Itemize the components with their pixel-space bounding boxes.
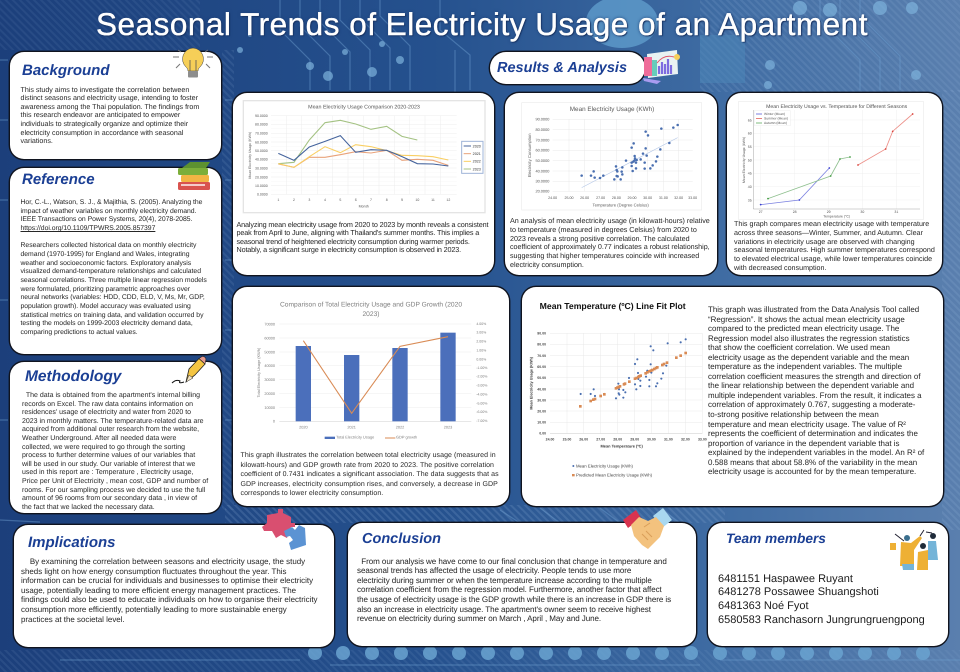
text: regression explanation: the linear relationship between the dependent variable and	[708, 381, 914, 390]
panel: conclusion	[348, 523, 696, 646]
text: methodology body: used in this report are : Temperature , Electricity usage,	[22, 469, 193, 476]
text: regression explanation: that show the coefficient correlation. We used mean	[708, 343, 890, 352]
text: regression explanation: represents the coefficient of determination and indicates the	[708, 429, 918, 438]
chart: mean temperature line fit plot: 27.00	[596, 438, 605, 442]
chart: electricity usage vs temperature by season: Temperature (°C)	[823, 215, 850, 219]
text: implications body: information can be crucial for individuals and businesses to optimise their electricity	[21, 576, 313, 585]
heading: implications: Implications	[28, 534, 116, 551]
text: seasonal caption: across three seasons—Winter, Summer, and Autumn. Clear	[734, 229, 923, 237]
text: GDP caption: GDP increases, electricity consumption rises, and conversely, a decrease in GDP	[240, 480, 498, 488]
chart: mean electricity usage comparison: 40.0000	[255, 158, 268, 162]
chart: mean electricity usage scatter: 60.0000	[535, 149, 549, 153]
chart: total electricity usage and GDP growth: 40000	[264, 364, 275, 368]
text: regression explanation: temperature as the independent variables. The multiple	[708, 362, 902, 371]
chart: mean electricity usage comparison: 2021	[473, 152, 481, 156]
chart: total electricity usage and GDP growth: 0	[273, 420, 275, 424]
text: regression explanation: correlation of approximately 0.767, suggesting a moderate-	[708, 400, 915, 409]
chart: mean electricity usage comparison: 30.0000	[255, 166, 268, 170]
text: implications body: consumption more efficiently, potentially leading to more sustainable energy	[21, 605, 287, 614]
text: background body: electricity consumption in accordance with seasonal	[20, 129, 183, 137]
text: seasonal caption: to elevated electrical usage, while lower temperatures coincide	[734, 255, 932, 263]
chart: electricity usage vs temperature by season: 55	[748, 145, 752, 149]
chart: total electricity usage and GDP growth: 2023	[444, 425, 452, 429]
chart: electricity usage vs temperature by season: 28	[793, 210, 797, 214]
text: regression explanation: correlation coefficient measures the strength and direction of	[708, 372, 921, 381]
text: regression explanation: “Regression”. It shows the actual mean electricity usage	[708, 315, 905, 324]
chart: total electricity usage and GDP growth: -5.00%	[476, 401, 487, 405]
text: team member list: 6481363 Noé Fyot	[718, 600, 809, 612]
text: seasonal caption: variations in electricity usage are observed with changing	[734, 238, 915, 246]
text: scatter caption: coefficient of approximately 0.77 indicates a robust relationship,	[510, 243, 710, 251]
chart: mean temperature line fit plot: 80.00	[537, 343, 546, 347]
chart: mean temperature line fit plot: 25.00	[563, 438, 571, 442]
chart: mean electricity usage scatter: 31.00	[659, 196, 668, 200]
chart: mean electricity usage scatter: 50.0000	[535, 159, 549, 163]
icon: pencil	[172, 356, 206, 384]
chart: mean temperature line fit plot: Mean Electricity Usage (KWh)	[530, 357, 534, 410]
chart: mean temperature line fit plot: 70.00	[537, 354, 546, 358]
text: citation and summary: weather and socioeconomic factors. Exploratory analysis	[20, 260, 191, 267]
chart: total electricity usage and GDP growth: 3.00%	[476, 331, 486, 335]
heading: team members: Team members	[726, 531, 826, 546]
text: scatter caption: An analysis of mean electricity usage (in kilowatt-hours) relative	[510, 217, 710, 225]
chart: total electricity usage and GDP growth: GDP growth	[396, 435, 417, 440]
chart: electricity usage vs temperature by season: Summer (Mean)	[764, 117, 788, 121]
chart: total electricity usage and GDP growth: 4.00%	[476, 322, 486, 326]
text: conclusion body: revenue on electricity during summer on March , April , May and June.	[357, 614, 601, 623]
icon: team celebrating	[890, 530, 938, 570]
chart: total electricity usage and GDP growth: 70000	[264, 322, 275, 326]
chart: mean electricity usage scatter: 28.00	[612, 196, 621, 200]
chart: mean electricity usage comparison: Month	[359, 205, 369, 209]
chart: total electricity usage and GDP growth: 20000	[264, 392, 275, 396]
chart: mean electricity usage scatter: 90.0000	[535, 118, 549, 122]
text: seasonal caption: This graph compares mean electricity usage with temperature	[734, 220, 929, 228]
text: seasonal caption: with decreased consumption.	[734, 264, 826, 272]
text: methodology body: process to further determine values of our variables that	[22, 452, 195, 459]
text: methodology body: 2023 in monthly matters. The temperature-related data are	[22, 418, 204, 425]
chart: mean electricity usage comparison: 20.0000	[255, 175, 268, 179]
chart: mean electricity usage scatter: Mean Electricity Usage (KWh)	[570, 106, 654, 113]
chart: mean electricity usage comparison: 9	[401, 198, 403, 202]
chart: total electricity usage and GDP growth: 0.00%	[476, 357, 486, 361]
chart: mean electricity usage comparison: 60.0000	[255, 140, 268, 144]
heading: background: Background	[22, 62, 110, 79]
chart: mean electricity usage scatter: 30.00	[643, 196, 652, 200]
chart: mean electricity usage scatter: 20.0000	[535, 190, 549, 194]
text: seasonal caption: seasonal temperatures. High summer temperatures correspond	[734, 246, 935, 254]
chart: electricity usage vs temperature by season: 60	[748, 132, 752, 136]
chart: mean temperature line fit plot: 10.00	[537, 421, 546, 425]
text: regression explanation: This graph was illustrated from the Data Analysis Tool called	[708, 305, 919, 314]
chart: mean electricity usage scatter: 33.00	[688, 196, 697, 200]
text: methodology body: residences' usage of electricity and water from 2020 to	[22, 409, 191, 416]
text: GDP caption: corresponds to lower electricity consumption.	[240, 490, 383, 497]
chart: total electricity usage and GDP growth: 2.00%	[476, 340, 486, 344]
chart: total electricity usage and GDP growth: 2023)	[362, 310, 380, 318]
title: Seasonal Trends of Electricity Usage of an Apartment	[96, 6, 868, 42]
heading: reference: Reference	[22, 171, 95, 188]
chart: total electricity usage and GDP growth: -6.00%	[476, 410, 487, 414]
text: methodology body: Price per Unit of Electricity , mean cost, GDP and number of	[22, 478, 208, 485]
chart: total electricity usage and GDP growth: 2021	[347, 425, 356, 429]
chart: mean temperature line fit plot: Mean Electricity Usage (KWh)	[576, 463, 633, 468]
chart: mean electricity usage comparison: 8	[386, 198, 388, 202]
icon: analytics chart	[643, 50, 680, 84]
chart: electricity usage vs temperature by season: 35	[748, 198, 752, 202]
text: citation and summary: Hor, C.-L., Watson, S. J., & Majithia, S. (2005). Analyzing the	[20, 199, 202, 206]
chart: total electricity usage and GDP growth: 2020	[299, 425, 308, 429]
text: background body	[20, 86, 199, 145]
chart: mean temperature line fit plot: 24.00	[546, 438, 554, 442]
heading: results and analysis: Results & Analysis	[497, 60, 627, 76]
text: team member list	[718, 572, 925, 626]
chart: mean electricity usage scatter: 80.0000	[535, 128, 549, 132]
text: line chart caption: seasonal trend of heightened electricity consumption during warmer periods.	[236, 237, 470, 246]
text: citation and summary	[20, 199, 207, 336]
chart: total electricity usage and GDP growth: -4.00%	[476, 393, 487, 397]
text: regression explanation: compared to the predicted mean electricity usage. The	[708, 324, 899, 333]
text: methodology body: amount of 96 rooms from our secondary data , in view of	[22, 495, 197, 502]
text: GDP caption: kilowatt-hours) and GDP growth rate from 2020 to 2023. The positive correlation	[240, 462, 494, 468]
chart: mean electricity usage comparison	[242, 100, 486, 214]
text: background body: distinct seasons and electricity usage, intending to foster	[20, 94, 198, 102]
text: implications body: findings could also be used to educate individuals on how to organise their electricity	[21, 595, 318, 604]
text: citation and summary: seasonal correlations. Three multiple linear regression models	[20, 277, 207, 284]
text: methodology body: records on Excel. The raw data contains information on	[22, 401, 193, 408]
panel: monthly line chart	[233, 93, 494, 275]
text: methodology body: acquired from additional outer research from the website,	[22, 426, 199, 433]
chart: electricity usage vs temperature by season: 50	[748, 158, 752, 162]
chart: mean temperature line fit plot: 30.00	[537, 398, 546, 402]
text: regression explanation: explained by the independent variables in the model. An R² of	[708, 448, 924, 457]
icon: stack of books	[178, 162, 210, 190]
text: citation and summary: population growth). Model accuracy was evaluated using	[20, 303, 191, 310]
text: conclusion body	[357, 556, 671, 623]
text: citation and summary: impact of weather variables on monthly electricity demand.	[20, 208, 196, 215]
chart: mean temperature line fit plot: 31.00	[664, 438, 673, 442]
chart: mean electricity usage comparison: 2023	[473, 167, 481, 171]
panel: team members	[708, 523, 948, 646]
chart: mean electricity usage scatter: 40.0000	[535, 169, 549, 173]
chart: mean temperature line fit plot: Predicted Mean Electricity Usage (KWh)	[576, 473, 652, 478]
text: GDP caption: This graph illustrates the correlation between total electricity usage (measured in	[240, 452, 496, 459]
text: background body: individuals to strategically organize and optimize their	[20, 120, 188, 128]
chart: electricity usage vs temperature by season: Autumn (Mean)	[764, 121, 787, 125]
text: regression explanation: to-strong positive relationship between the mean	[708, 410, 879, 419]
text: scatter caption: to temperature (measured in degrees Celsius) from 2020 to	[510, 226, 697, 234]
icon: puzzle pieces	[262, 509, 306, 550]
chart: mean temperature line fit plot: Mean Temperature (ºC)	[601, 444, 643, 448]
text: seasonal caption	[734, 220, 935, 272]
text: line chart caption: peak from April to June, aligning with Thailand's summer months. This implies a	[236, 228, 479, 237]
chart: mean temperature line fit plot: Mean Temperature (ºC) Line Fit Plot	[540, 301, 686, 311]
text: GDP caption	[240, 452, 499, 497]
chart: mean electricity usage scatter: 30.0000	[535, 180, 549, 184]
chart: electricity usage vs temperature by season: 30	[860, 210, 864, 214]
chart: mean electricity usage comparison: 12	[446, 198, 450, 202]
chart: electricity usage vs temperature by season: 29	[827, 210, 831, 214]
panel: electricity and GDP chart	[233, 287, 509, 506]
chart: electricity usage vs temperature by season: Mean Electricity Usage vs. Temperature for Different Seasons	[766, 104, 907, 109]
text: methodology body	[22, 392, 208, 511]
chart: mean temperature line fit plot: 50.00	[537, 376, 546, 380]
text: citation and summary: Researchers collected historical data on monthly electricity	[20, 242, 196, 249]
icon: light bulb	[173, 48, 213, 78]
text: line chart caption: Analyzing mean electricity usage from 2020 to 2023 by month reveals a consistent	[236, 220, 488, 229]
chart: mean electricity usage comparison: 4	[324, 198, 326, 202]
text: conclusion body: From our analysis we have come to our final conclusion that change in temperature and	[361, 556, 667, 566]
chart: mean electricity usage scatter: 70.0000	[535, 138, 549, 142]
text: implications body: usage, potentially leading to more efficient energy management practices. The	[21, 586, 296, 595]
text: implications body: sheds light on how energy consumption fluctuates throughout the year. This	[21, 567, 286, 576]
text: regression explanation	[708, 305, 924, 476]
panel: implications	[14, 525, 334, 647]
chart: mean electricity usage scatter: 27.00	[596, 196, 605, 200]
chart: total electricity usage and GDP growth: -1.00%	[476, 366, 487, 370]
chart: mean temperature line fit plot: 32.00	[681, 438, 690, 442]
chart: mean electricity usage comparison: 2020	[473, 144, 481, 148]
chart: mean electricity usage scatter: 25.00	[564, 196, 574, 200]
chart: mean temperature line fit plot: 29.00	[630, 438, 639, 442]
chart: mean electricity usage comparison: 90.0000	[255, 114, 268, 118]
text: citation and summary: testing the models on 1999-2003 electricity demand data,	[20, 320, 193, 327]
text: methodology body: will be used in our study. Our variable of interest that we	[22, 461, 195, 468]
text: methodology body: rooms. For our sampling process we decided to use the full	[22, 487, 205, 494]
chart: mean electricity usage scatter: 32.00	[674, 196, 683, 200]
chart: total electricity usage and GDP growth: -3.00%	[476, 384, 487, 388]
text: conclusion body: electricity during summer or when the temperature increase according to the multiple	[357, 576, 652, 585]
text: methodology body: the fact that we lacked the necessary data.	[22, 504, 155, 511]
heading panel: results and analysis	[490, 52, 645, 84]
chart: total electricity usage and GDP growth	[257, 301, 488, 440]
chart: mean electricity usage comparison: 80.0000	[255, 123, 268, 127]
text: conclusion body: correlation coefficient from the regression model. Furthermore, another factor that affect	[357, 585, 662, 594]
text: regression explanation: proportion of variance in the dependent variable that is	[708, 439, 900, 448]
text: team member list: 6481151 Haspawee Ruyant	[718, 572, 853, 584]
text: regression explanation: electricity usage as the dependent variable and the mean	[708, 353, 909, 362]
panel: regression line fit plot	[522, 287, 943, 506]
chart: mean temperature line fit plot: 0.00	[539, 432, 546, 436]
chart: total electricity usage and GDP growth: Total Electricity Usage (KWh)	[257, 348, 261, 397]
chart: total electricity usage and GDP growth: -7.00%	[476, 419, 487, 423]
text: conclusion body: the usage of electricity usage is the GDP growth while there is an increase in GDP there is	[357, 595, 671, 604]
chart: total electricity usage and GDP growth: 50000	[264, 350, 275, 354]
chart: electricity usage vs temperature by season: 65	[748, 118, 752, 122]
chart: electricity usage vs temperature by season: 40	[748, 185, 752, 189]
chart: mean electricity usage comparison: 1	[277, 198, 279, 202]
chart: mean electricity usage scatter: Electricity Consumption	[527, 133, 532, 177]
chart: mean temperature line fit plot: 60.00	[537, 365, 546, 369]
chart: mean temperature line fit plot: 26.00	[579, 438, 588, 442]
text: citation and summary: neural networks (variables: HDD, CDD, ELD, V, Ms, Mr, GDP,	[20, 294, 205, 301]
chart: total electricity usage and GDP growth: 60000	[264, 336, 275, 340]
text: citation and summary: demand (1970-1995) for England and Wales, integrating	[20, 251, 189, 258]
chart: mean temperature line fit plot: 28.00	[613, 438, 622, 442]
chart: mean electricity usage comparison: Mean Electricity Usage (KWh)	[248, 132, 252, 179]
chart: mean electricity usage comparison: 11	[431, 198, 435, 202]
text: scatter caption: 2023 reveals a strong positive correlation. The calculated	[510, 235, 690, 243]
text: methodology body: collected, we were required to go through the sorting	[22, 444, 185, 451]
chart: mean electricity usage comparison: 10.0000	[255, 184, 268, 188]
text: scatter caption: electricity consumption.	[510, 261, 584, 269]
chart: mean electricity usage comparison: 5	[339, 198, 341, 202]
panel: seasonal temperature chart	[727, 93, 942, 275]
chart: mean electricity usage scatter: 24.00	[548, 196, 557, 200]
chart: electricity usage vs temperature by season: 27	[759, 210, 763, 214]
chart: mean electricity usage comparison: 50.0000	[255, 149, 268, 153]
text: implications body: By examining the correlation between seasons and electricity usage, the study	[30, 557, 305, 566]
chart: mean temperature line fit plot	[530, 301, 707, 478]
chart: mean temperature line fit plot: 40.00	[537, 387, 546, 391]
text: regression explanation: temperature and mean electricity usage. The value of R²	[708, 420, 906, 429]
text: citation and summary: comparing predictions to actual values.	[20, 329, 138, 336]
chart: mean electricity usage comparison: 0.0000	[257, 193, 268, 197]
text: regression explanation: electricity usage is accounted for by the mean temperature.	[708, 467, 916, 476]
chart: mean temperature line fit plot: 33.00	[698, 438, 707, 442]
chart: mean temperature line fit plot: 90.00	[537, 332, 546, 336]
text: regression explanation: 0.588 means that about 58.8% of the variability in the mean	[708, 458, 917, 467]
chart: electricity usage vs temperature by season: 45	[748, 172, 752, 176]
text: background body: this research endeavor are anticipated to empower	[20, 111, 180, 119]
chart: mean electricity usage comparison: 70.0000	[255, 132, 268, 136]
chart: mean electricity usage comparison: 6	[355, 198, 357, 202]
chart: mean electricity usage comparison: Mean Electricity Usage Comparison 2020-2023	[308, 104, 420, 110]
text: team member list: 6481278 Possawee Shuangshoti	[718, 586, 879, 598]
text: team member list: 6580583 Ranchasorn Jungrungruengpong	[718, 614, 925, 626]
text: citation and summary: statistical metrics on training data, and validation occurred by	[20, 312, 203, 319]
chart: mean electricity usage comparison: 3	[308, 198, 310, 202]
chart: total electricity usage and GDP growth: -2.00%	[476, 375, 487, 379]
text: regression explanation: multiple independent variables. From the result, it indicates a	[708, 391, 922, 400]
text: citation and summary: https://doi.org/10.1109/TPWRS.2005.857397	[20, 225, 155, 232]
chart: total electricity usage and GDP growth: Comparison of Total Electricity Usage and GDP Growth (2020	[280, 301, 462, 308]
text: line chart caption: Notably, a significant surge in electricity consumption is observed in 2023.	[236, 245, 461, 254]
chart: mean electricity usage comparison: 2	[293, 198, 295, 202]
text: GDP caption: coefficient of 0.7431 indicates a significant association. The data suggests that as	[240, 471, 499, 478]
chart: mean electricity usage scatter: 29.00	[627, 196, 637, 200]
text: background body: awareness among the Thai population. The findings from	[20, 103, 199, 111]
text: scatter caption: suggesting that higher temperatures coincide with increased	[510, 252, 699, 260]
text: methodology body: The data is obtained from the apartment's internal billing	[26, 392, 200, 399]
chart: electricity usage vs temperature by season: Winter (Mean)	[764, 112, 785, 116]
text: conclusion body: also an increase in electricity usage. The apartment's owner seem to receive highest	[357, 605, 651, 614]
chart: electricity usage vs temperature by season	[738, 102, 924, 220]
text: regression explanation: Regression model also illustrates the regression statistics	[708, 334, 910, 343]
chart: total electricity usage and GDP growth: 1.00%	[476, 348, 486, 352]
heading: conclusion: Conclusion	[362, 531, 441, 547]
chart: mean electricity usage scatter: Temperature (Degree Celsius)	[593, 203, 649, 207]
chart: mean electricity usage comparison: 10	[415, 198, 419, 202]
chart: mean electricity usage scatter	[522, 102, 702, 210]
text: implications body	[21, 557, 318, 624]
chart: total electricity usage and GDP growth: Total Electricity Usage	[336, 435, 374, 440]
heading: methodology: Methodology	[25, 368, 121, 385]
chart: mean electricity usage scatter: 26.00	[580, 196, 589, 200]
text: citation and summary: IEEE Transactions on Power Systems, 20(4), 2078-2085.	[20, 216, 192, 223]
text: scatter caption	[510, 217, 710, 269]
text: conclusion body: seasonal trends has affected the usage of electricity. People tends to use more	[357, 566, 631, 575]
chart: mean temperature line fit plot: 20.00	[537, 409, 546, 413]
text: citation and summary: were formulated, prioritizing parametric approaches over	[20, 286, 190, 293]
text: citation and summary: visualized demand-temperature relationships and calculated	[20, 268, 201, 275]
text: background body: This study aims to investigate the correlation between	[20, 86, 189, 94]
panel: background	[10, 52, 221, 159]
chart: total electricity usage and GDP growth: 2022	[396, 425, 404, 429]
panel: reference	[10, 168, 221, 354]
text: line chart caption	[236, 220, 488, 254]
text: methodology body: Weather Underground. After all needed data were	[22, 435, 176, 442]
panel: temperature scatter chart	[505, 93, 717, 275]
chart: total electricity usage and GDP growth: 30000	[264, 378, 275, 382]
chart: mean electricity usage comparison: 7	[370, 198, 372, 202]
text: implications body: practices at the societal level.	[21, 615, 125, 624]
chart: electricity usage vs temperature by season: 31	[894, 210, 898, 214]
chart: mean temperature line fit plot: 30.00	[647, 438, 656, 442]
chart: mean electricity usage comparison: 2022	[473, 160, 481, 164]
text: background body: variations.	[20, 137, 53, 145]
icon: handshake	[623, 508, 672, 549]
chart: electricity usage vs temperature by season: Mean Electricity Usage (kWh)	[742, 137, 746, 183]
chart: total electricity usage and GDP growth: 10000	[264, 406, 275, 410]
panel: methodology	[10, 362, 221, 513]
